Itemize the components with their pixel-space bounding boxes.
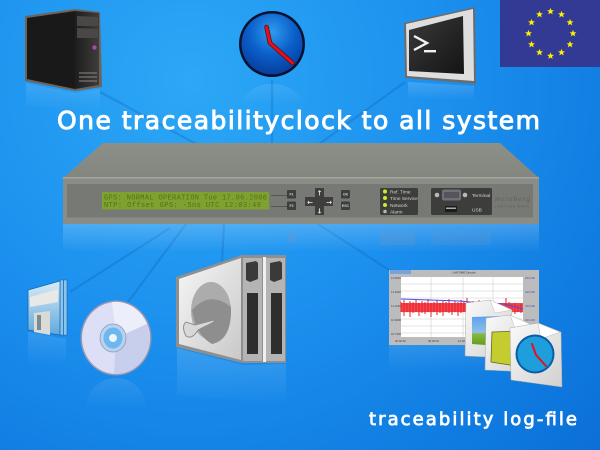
device reflection bbox=[63, 224, 539, 252]
document: yellow bbox=[485, 315, 532, 372]
arrow keypad: ↓ bbox=[317, 208, 322, 216]
terminal and USB ports: USB bbox=[472, 208, 482, 214]
brand label bbox=[495, 194, 530, 208]
log-file chart window: 11.5000 bbox=[391, 276, 401, 280]
document: clock bbox=[510, 323, 562, 387]
log-file chart window: 10.7000 bbox=[391, 332, 402, 336]
log-file chart window: 320.000 bbox=[525, 304, 536, 308]
arrow keypad: ← bbox=[307, 198, 313, 206]
terminal and USB ports bbox=[431, 188, 492, 215]
icon: CD bbox=[80, 300, 152, 408]
terminal and USB ports: Terminal bbox=[472, 193, 490, 199]
arrow keypad bbox=[305, 188, 333, 216]
function keys: OK bbox=[343, 192, 349, 196]
icon: blue clock bbox=[239, 11, 305, 105]
LCD display bbox=[102, 192, 269, 210]
function keys: F2 bbox=[289, 204, 294, 208]
arrow keypad: → bbox=[326, 198, 332, 206]
status LEDs: Alarm bbox=[390, 210, 403, 216]
icon: terminal monitor bbox=[404, 7, 476, 100]
caption: traceability log-file: traceability log-file bbox=[369, 409, 577, 430]
device: time server bbox=[63, 143, 539, 252]
EU flag bbox=[500, 0, 600, 67]
document: picture bbox=[465, 300, 512, 358]
status LEDs: Time Service bbox=[390, 196, 418, 202]
log-file chart window: 11.1000 bbox=[391, 304, 401, 308]
log-file chart window: 11.3000 bbox=[391, 290, 401, 294]
log-file chart window: 340.000 bbox=[525, 290, 536, 294]
brand label: LANTIME M300 bbox=[495, 204, 529, 208]
device front bbox=[63, 177, 539, 224]
log-file chart window: 360.000 bbox=[525, 276, 536, 280]
icon: hard drive bbox=[176, 255, 286, 405]
log-file chart window: LANTIME Drucks bbox=[452, 270, 476, 274]
icon: computer tower bbox=[25, 9, 102, 110]
title: One traceabilityclock to all system bbox=[57, 106, 540, 135]
connection lines from device to icons bbox=[70, 80, 420, 302]
status LEDs bbox=[380, 188, 418, 216]
status LEDs: Network bbox=[390, 203, 408, 209]
function keys: F1 bbox=[289, 192, 294, 196]
log-file chart window: 12:00:00 bbox=[458, 339, 469, 343]
arrow keypad: ↑ bbox=[317, 190, 322, 198]
function keys: ESC bbox=[342, 204, 350, 208]
icon: stacked documents bbox=[465, 300, 562, 387]
log-file chart window: 09:00:00 bbox=[428, 339, 439, 343]
function keys bbox=[271, 190, 350, 210]
brand label: meinberg bbox=[495, 194, 530, 203]
status LEDs: Ref. Time bbox=[390, 190, 411, 196]
log-file chart window: 10.9000 bbox=[391, 318, 402, 322]
log-file chart window: 06:00:00 bbox=[395, 339, 406, 343]
LCD display: NTP: Offset GPS: -5ns UTC 12:03:49 bbox=[104, 202, 261, 210]
LCD display: GPS: NORMAL OPERATION Tue 17.06.2006 bbox=[104, 194, 267, 202]
log-file chart window: 300.000 bbox=[525, 318, 536, 322]
log-file chart window bbox=[389, 270, 539, 373]
icon: floppy stack bbox=[28, 280, 67, 365]
device top bbox=[63, 143, 539, 178]
chart plot area bbox=[401, 277, 523, 337]
